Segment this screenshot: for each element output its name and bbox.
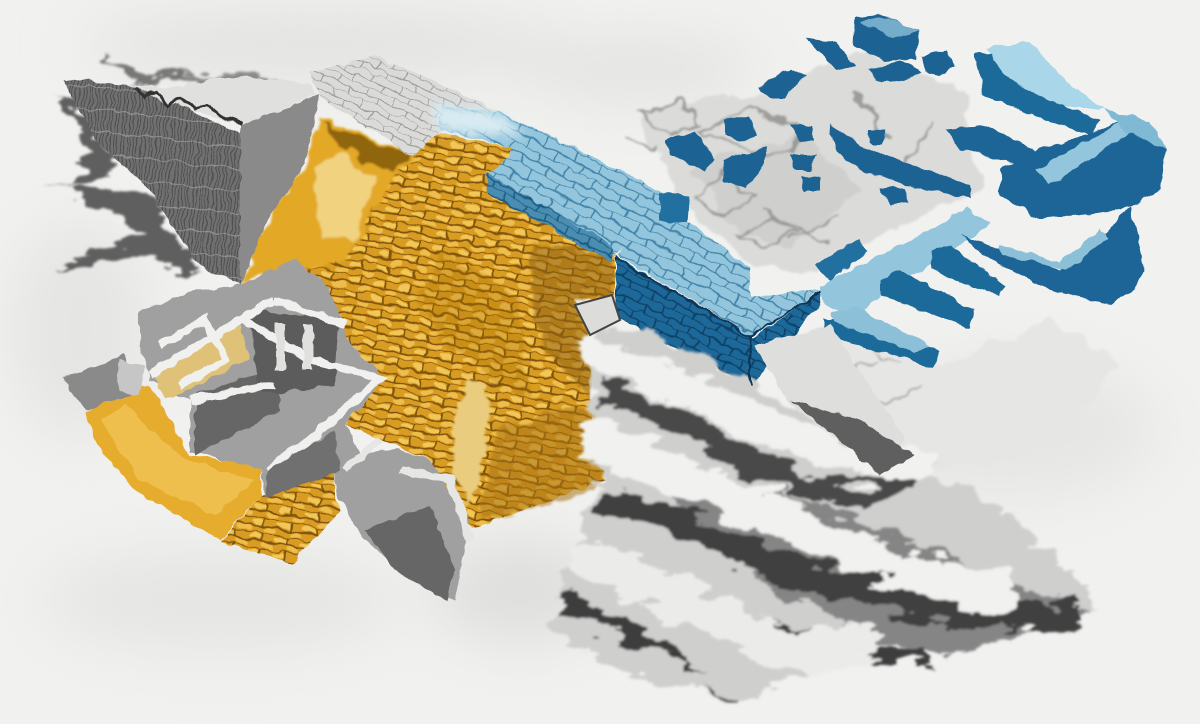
- blue ruins: lower right complex: [815, 205, 1145, 368]
- dark grey wall block: [62, 75, 318, 285]
- grey stone wall top left: [310, 55, 500, 155]
- paved foreground below the blue wall: [760, 320, 1120, 470]
- left dark shadow scrub: [45, 50, 310, 270]
- outline accents on blue block: [616, 258, 822, 385]
- blue wall section: front block: [616, 222, 822, 385]
- paved plaza behind the wall: [625, 50, 985, 275]
- cliff below the wall: [550, 295, 1105, 700]
- blue ruins: upper right complex: [945, 42, 1165, 220]
- grey ruined building foreground: [62, 258, 470, 600]
- gold excavated fill: main mound: [240, 113, 615, 528]
- gold lower left patch: [85, 385, 340, 562]
- blue scattered stones: [665, 15, 972, 205]
- blue wall section: top surface: [430, 102, 690, 262]
